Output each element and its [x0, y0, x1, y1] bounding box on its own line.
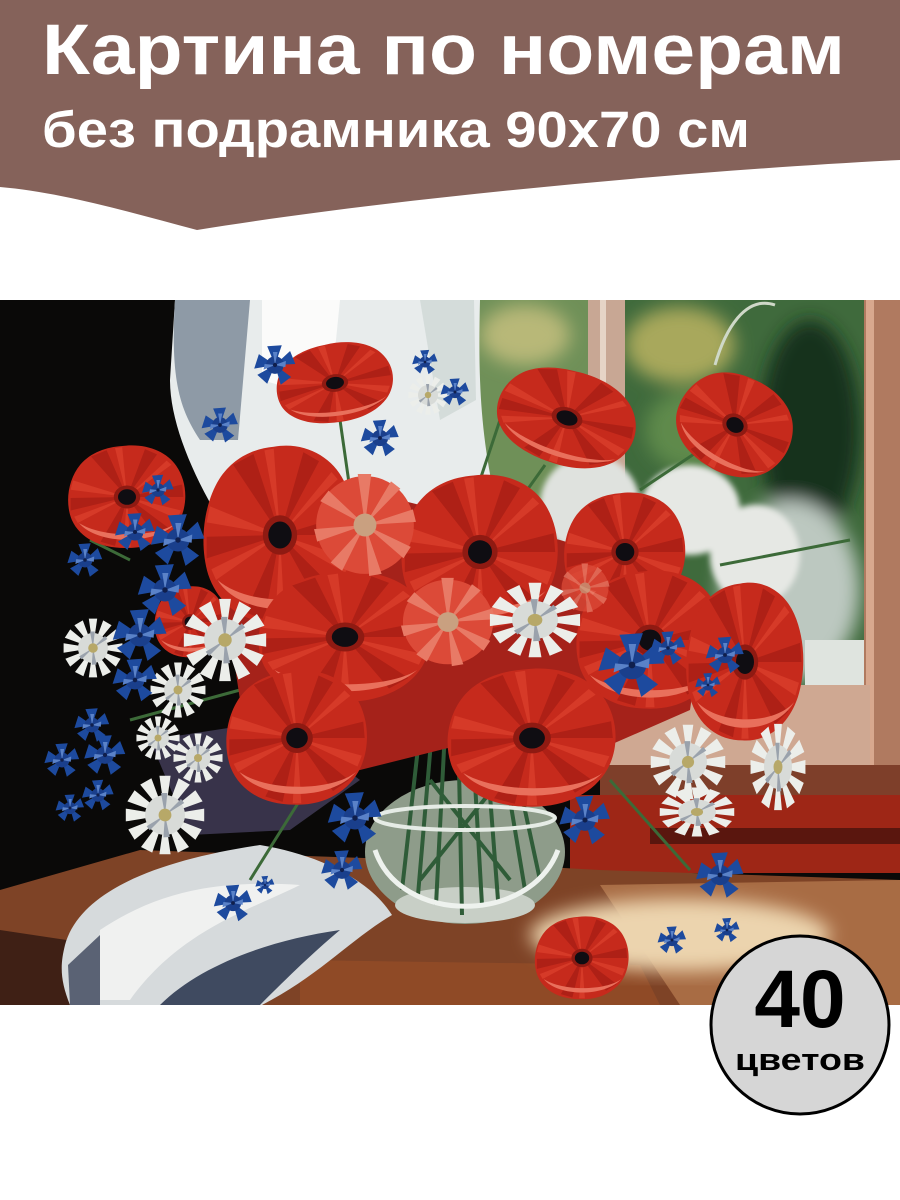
header banner — [0, 0, 900, 230]
poppy: centre — [401, 475, 558, 629]
cornflowers: left cluster — [44, 475, 205, 822]
badge number: 40 — [754, 954, 846, 1045]
title: Картина по номерам — [42, 11, 845, 90]
wooden table — [0, 850, 900, 1005]
daisies — [64, 375, 805, 854]
gerbera: pink — [401, 578, 495, 666]
poppy: right middle — [576, 571, 723, 709]
poppy: far right — [686, 583, 803, 741]
poppy: right upper — [564, 492, 685, 611]
badge label: цветов — [735, 1042, 865, 1077]
dark cloth behind the vase — [150, 720, 360, 835]
poppy: far left — [68, 445, 185, 548]
bouquet red mass — [225, 500, 700, 780]
poppy: lower centre — [448, 669, 616, 807]
gerbera: red — [314, 474, 416, 576]
poppy: middle left — [259, 571, 431, 702]
subtitle: без подрамника 90х70 см — [42, 101, 750, 158]
gerbera: faded — [560, 564, 610, 612]
poppy: fallen on table — [535, 916, 629, 999]
window frame — [570, 300, 900, 873]
poppy: left small — [155, 586, 225, 657]
cornflowers: right over poppies — [559, 631, 744, 954]
poppy: top centre — [496, 368, 636, 468]
cornflowers: lower centre — [214, 792, 382, 921]
stems and leaves — [90, 303, 850, 880]
dark background — [0, 300, 900, 890]
curtain — [170, 300, 500, 520]
poppy: upper left large — [203, 446, 356, 623]
window view — [470, 300, 870, 700]
white cloth — [62, 845, 392, 1005]
poppy: top centre left — [276, 342, 393, 424]
poppy: top right — [676, 372, 793, 478]
poppy: lower left — [226, 671, 367, 805]
glass vase — [365, 748, 565, 924]
cornflowers: top — [202, 345, 469, 456]
white flowers behind the bouquet — [540, 455, 800, 605]
painting: poppies and cornflowers in a glass vase — [0, 300, 900, 1005]
badge: 40 colours — [711, 936, 889, 1114]
